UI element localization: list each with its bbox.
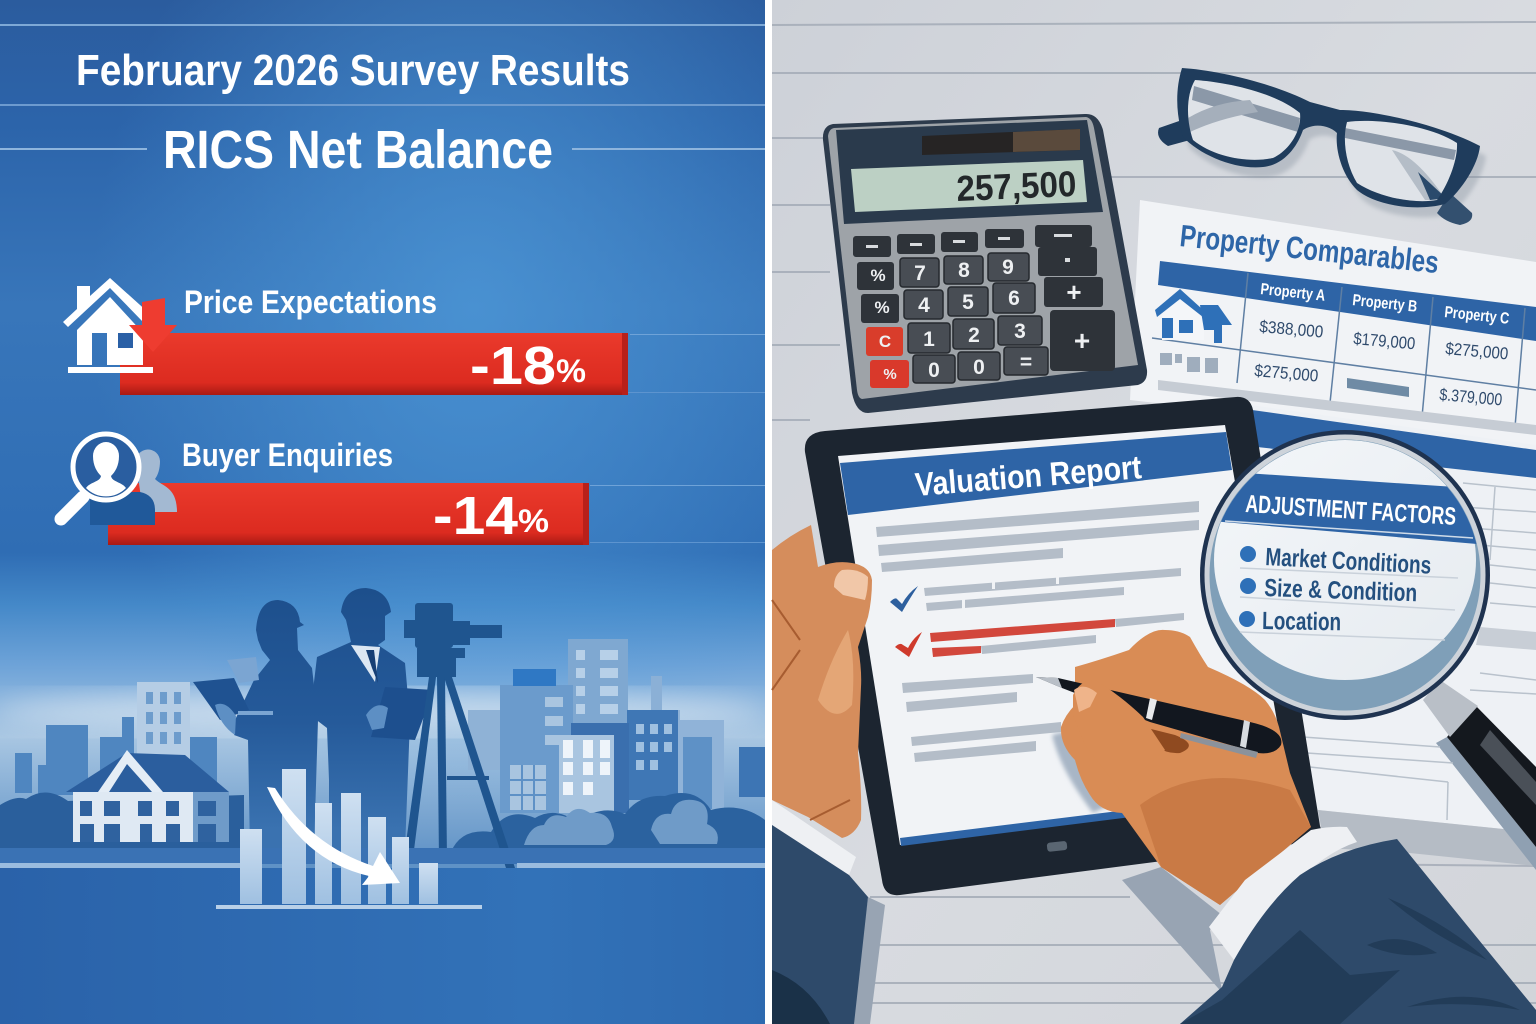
calculator keypad: 7 <box>914 262 926 285</box>
magnifier handle <box>1447 705 1536 847</box>
thumb over pen <box>1073 680 1165 790</box>
table header <box>1158 261 1536 341</box>
illustration: city skyline <box>0 639 770 852</box>
table values: $179,000 <box>1353 329 1416 353</box>
calculator keypad: + <box>1066 277 1082 307</box>
icon: blue check <box>890 586 918 612</box>
calculator keypad: 0 <box>973 356 985 379</box>
table values: $275,000 <box>1445 339 1509 363</box>
home button <box>1047 841 1067 852</box>
sleeve cuff <box>1209 827 1357 960</box>
table column headings: Property B <box>1352 292 1418 316</box>
factors list <box>1239 543 1432 636</box>
illustration: surveyor with clipboard <box>193 600 318 850</box>
table column headings: Property C <box>1444 304 1510 328</box>
calculator keypad: % <box>870 266 886 285</box>
left hand holding tablet <box>772 525 872 1024</box>
lower page band <box>1252 410 1536 478</box>
tablet screen <box>838 425 1290 845</box>
calculator keypad: 8 <box>958 259 970 282</box>
factors list: Location <box>1262 607 1341 636</box>
report header band <box>840 432 1232 515</box>
calculator keypad: 5 <box>962 291 974 314</box>
suit sleeve <box>1180 839 1536 1024</box>
gutter <box>765 0 772 1024</box>
illustration: ground band <box>0 848 765 1024</box>
table values <box>1254 317 1509 409</box>
glasses <box>1158 68 1486 225</box>
factors list: Market Conditions <box>1265 543 1432 580</box>
panel: valuation desk scene (right) <box>772 0 1536 1024</box>
heading: property comparables: Property Comparables <box>1178 218 1441 280</box>
tablet <box>805 397 1325 895</box>
calculator keypad: % <box>874 298 890 317</box>
bar: buyer enquiries -14% <box>108 483 589 546</box>
document: property comparables <box>1130 200 1536 870</box>
calculator keypad: 3 <box>1014 320 1026 343</box>
calculator keypad: % <box>883 366 897 383</box>
magnifier lens <box>1200 430 1490 720</box>
calculator display value: 257,500 <box>956 163 1077 209</box>
illustration: survey tripod instrument <box>404 603 515 868</box>
bar: price expectations -18%: -18 <box>470 336 556 396</box>
calculator keypad: = <box>1020 351 1032 374</box>
calculator keypad: + <box>1074 325 1090 356</box>
calculator keypad: 0 <box>928 359 940 382</box>
factors list: Size & Condition <box>1264 574 1418 607</box>
calculator keypad: 6 <box>1008 287 1020 310</box>
bar: price expectations -18%: % <box>556 353 586 389</box>
calculator keypad: 4 <box>918 294 930 317</box>
table values: $.379,000 <box>1439 385 1503 409</box>
heading: adjustment factors: ADJUSTMENT FACTORS <box>1245 490 1457 531</box>
right hand with pen <box>1036 630 1536 1024</box>
heading: RICS Net Balance: RICS Net Balance <box>163 120 553 180</box>
table column headings: Property A <box>1260 281 1326 305</box>
illustration: surveyor in suit <box>310 588 434 850</box>
report body lines <box>876 501 1199 762</box>
calculator keypad: C <box>879 332 891 351</box>
heading: valuation report: Valuation Report <box>914 448 1143 503</box>
calculator keypad: 1 <box>923 328 935 351</box>
magnifier <box>1200 430 1536 847</box>
illustration: house <box>66 750 229 842</box>
calculator <box>823 114 1147 413</box>
calculator keypad: 2 <box>968 324 980 347</box>
icon: blue house <box>1155 289 1232 373</box>
bar: price expectations -18% <box>120 333 628 396</box>
desk shadows <box>852 867 1250 1024</box>
table values: $275,000 <box>1254 361 1319 386</box>
title: February 2026 Survey Results <box>76 46 630 95</box>
table values: $388,000 <box>1259 317 1324 342</box>
icon: magnifier with people <box>61 434 177 525</box>
icon: red check <box>895 632 922 657</box>
pen <box>1036 677 1281 753</box>
icon: house with down arrow <box>63 278 177 373</box>
bar: buyer enquiries -14%: % <box>518 503 549 539</box>
table column headings <box>1260 281 1510 328</box>
illustration: declining bar chart <box>216 769 482 909</box>
arrow: downward trend <box>267 787 400 885</box>
label: buyer enquiries: Buyer Enquiries <box>182 437 393 473</box>
label: price expectations: Price Expectations <box>184 284 437 320</box>
panel: survey results (left) <box>0 0 770 1024</box>
bar: buyer enquiries -14%: -14 <box>433 486 518 546</box>
calculator keypad <box>853 225 1115 388</box>
calculator keypad: 9 <box>1002 256 1014 279</box>
